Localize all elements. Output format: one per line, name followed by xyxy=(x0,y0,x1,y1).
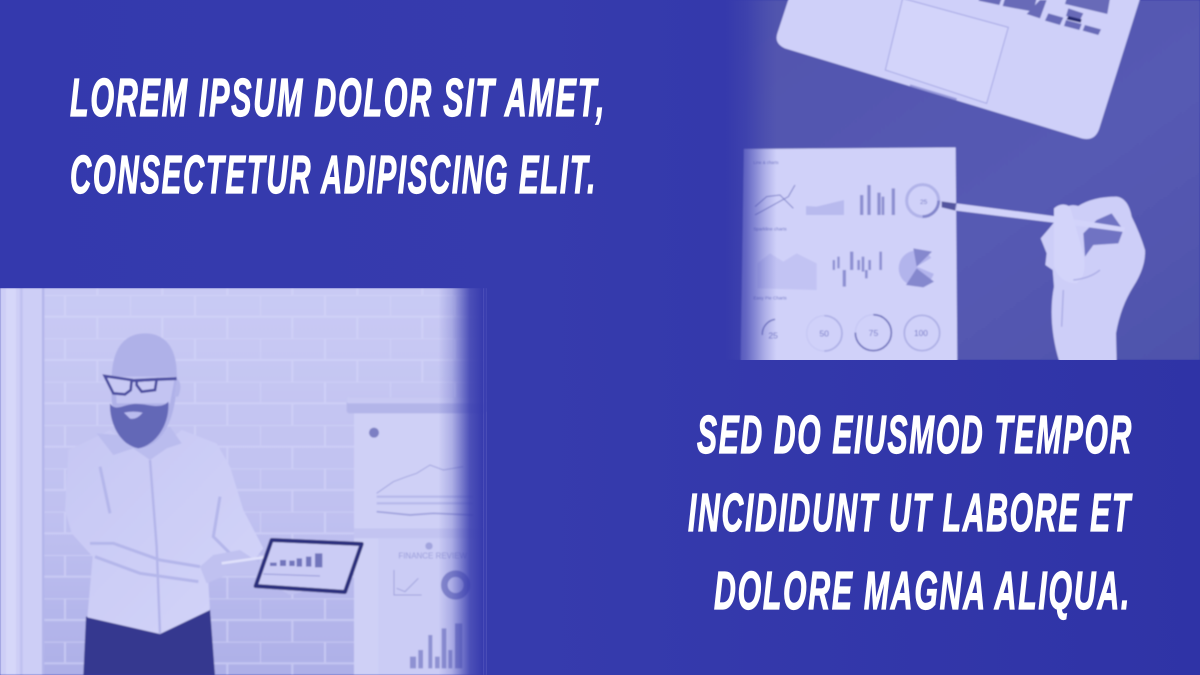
heading: top left xyxy=(70,68,606,205)
window frame xyxy=(0,288,44,675)
pie chart xyxy=(899,248,937,287)
flip chart heading: FINANCE REVIEW xyxy=(398,552,468,561)
progress ring 50: 50 xyxy=(819,329,829,339)
thumb xyxy=(1052,204,1069,218)
hands and pen xyxy=(200,550,303,595)
pen xyxy=(942,201,1125,232)
right edge fade xyxy=(438,288,483,675)
brick wall xyxy=(0,288,487,675)
printed chart sheet xyxy=(741,147,957,362)
progress ring 100 xyxy=(904,315,940,351)
progress ring 25: 25 xyxy=(768,331,778,341)
area chart xyxy=(806,200,844,215)
progress ring 75 xyxy=(855,315,891,351)
section labels xyxy=(753,160,787,300)
area chart two xyxy=(757,253,817,290)
shirt xyxy=(65,430,263,634)
donut 25 xyxy=(907,185,939,217)
progress ring 75: 75 xyxy=(869,328,878,338)
head xyxy=(111,333,177,448)
photo: presenter with tablet and flip chart xyxy=(0,288,487,675)
jeans xyxy=(83,608,215,675)
photo: laptop, printed charts and hand on desk xyxy=(700,0,1200,362)
hand xyxy=(1041,197,1145,362)
tablet xyxy=(256,540,362,592)
presenter xyxy=(65,333,362,675)
left edge fade xyxy=(700,0,777,360)
progress ring 25 xyxy=(762,319,778,341)
section labels: Sparkline charts xyxy=(753,226,787,231)
heading: top left: CONSECTETUR ADIPISCING ELIT. xyxy=(70,145,597,205)
section labels: Easy Pie Charts xyxy=(753,295,787,300)
beard xyxy=(110,402,168,448)
progress ring 50 xyxy=(819,314,844,352)
laptop xyxy=(777,0,1141,139)
heading: top left: LOREM IPSUM DOLOR SIT AMET, xyxy=(70,68,606,128)
glasses xyxy=(105,376,157,394)
shadow between fingers xyxy=(1083,213,1123,257)
progress ring 100: 100 xyxy=(914,328,928,338)
line chart xyxy=(755,185,795,215)
bar chart xyxy=(860,185,895,215)
shirt folds xyxy=(150,460,160,633)
heading: bottom right xyxy=(688,405,1133,621)
desk xyxy=(700,0,1200,360)
flip chart xyxy=(347,397,487,675)
printed chart sheet: 25 xyxy=(920,199,928,206)
section labels: Line & charts xyxy=(753,160,779,165)
waterfall bars xyxy=(833,252,882,287)
